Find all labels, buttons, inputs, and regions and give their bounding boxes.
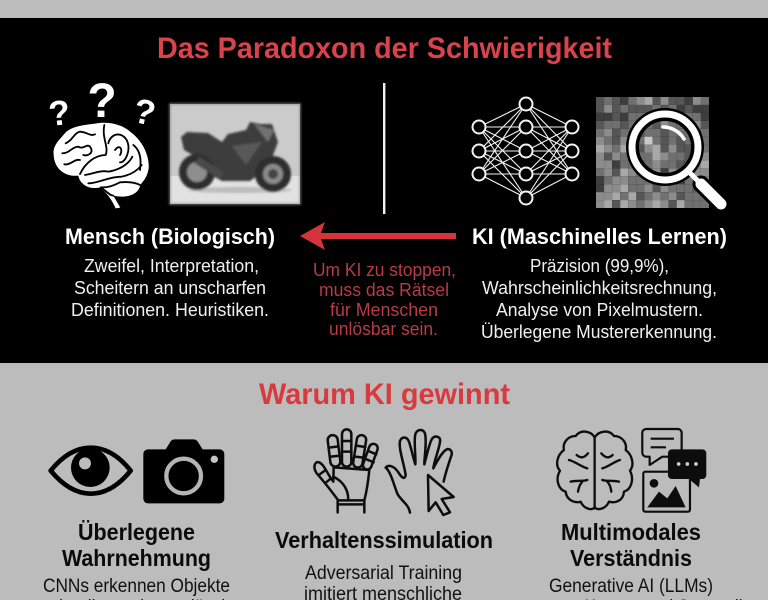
heading: superior perception: Überlegene	[78, 519, 195, 545]
divider	[383, 83, 385, 214]
text: human: Zweifel, Interpretation,	[84, 256, 259, 276]
text: human: Definitionen. Heuristiken.	[71, 300, 269, 320]
callout: Um KI zu stoppen,	[313, 260, 456, 280]
callout: unlösbar sein.	[329, 319, 438, 339]
callout	[313, 260, 456, 339]
heading: superior perception: Wahrnehmung	[62, 545, 211, 571]
title: Das Paradoxon der Schwierigkeit	[157, 32, 612, 65]
text: perception: CNNs erkennen Objekte	[43, 576, 230, 597]
text: human	[71, 256, 269, 320]
icon: outline brain	[557, 432, 632, 509]
icon: brain with question marks: ?	[130, 91, 159, 134]
heading: behaviour simulation: Verhaltenssimulation	[275, 527, 493, 553]
icon: brain with question marks	[47, 75, 159, 208]
column: behaviour	[275, 429, 493, 600]
arrow	[300, 222, 456, 250]
image: blurred motorcycle	[170, 104, 300, 204]
heading: why AI wins: Warum KI gewinnt	[259, 378, 510, 411]
icon: eye	[51, 448, 131, 494]
heading: superior perception	[62, 519, 211, 571]
icon: neural network	[472, 98, 578, 204]
heading: human: Mensch (Biologisch)	[65, 224, 275, 249]
heading: machine learning: KI (Maschinelles Lernen)	[472, 224, 727, 249]
heading: multimodal understanding	[561, 519, 701, 571]
icon: brain with question marks: ?	[47, 93, 72, 134]
text: machine learning	[481, 256, 717, 342]
column: perception	[42, 439, 251, 600]
icon: speech bubbles and image	[642, 429, 706, 512]
callout: für Menschen	[330, 300, 438, 320]
text: multimodal: Generative AI (LLMs)	[549, 576, 713, 597]
text: machine learning: Wahrscheinlichkeitsrechnung,	[482, 278, 717, 298]
column: multimodal	[544, 429, 747, 600]
icon: camera	[143, 439, 224, 503]
heading: multimodal understanding: Multimodales	[561, 519, 701, 545]
text: machine learning: Überlegene Mustererkennung.	[481, 322, 717, 342]
callout: muss das Rätsel	[319, 280, 449, 300]
text: human: Scheitern an unscharfen	[74, 278, 266, 298]
icon: human hand with cursor	[386, 430, 454, 515]
text: behaviour	[304, 563, 462, 600]
text: machine learning: Analyse von Pixelmustern.	[496, 300, 703, 320]
image: pixel mosaic with magnifier	[596, 97, 721, 208]
text: behaviour: Adversarial Training	[305, 563, 462, 584]
icon: robot hand	[314, 429, 379, 512]
panel: paradox	[0, 18, 768, 363]
heading: multimodal understanding: Verständnis	[570, 545, 692, 571]
text: machine learning: Präzision (99,9%),	[530, 256, 669, 276]
icon: brain with question marks: ?	[87, 75, 117, 128]
